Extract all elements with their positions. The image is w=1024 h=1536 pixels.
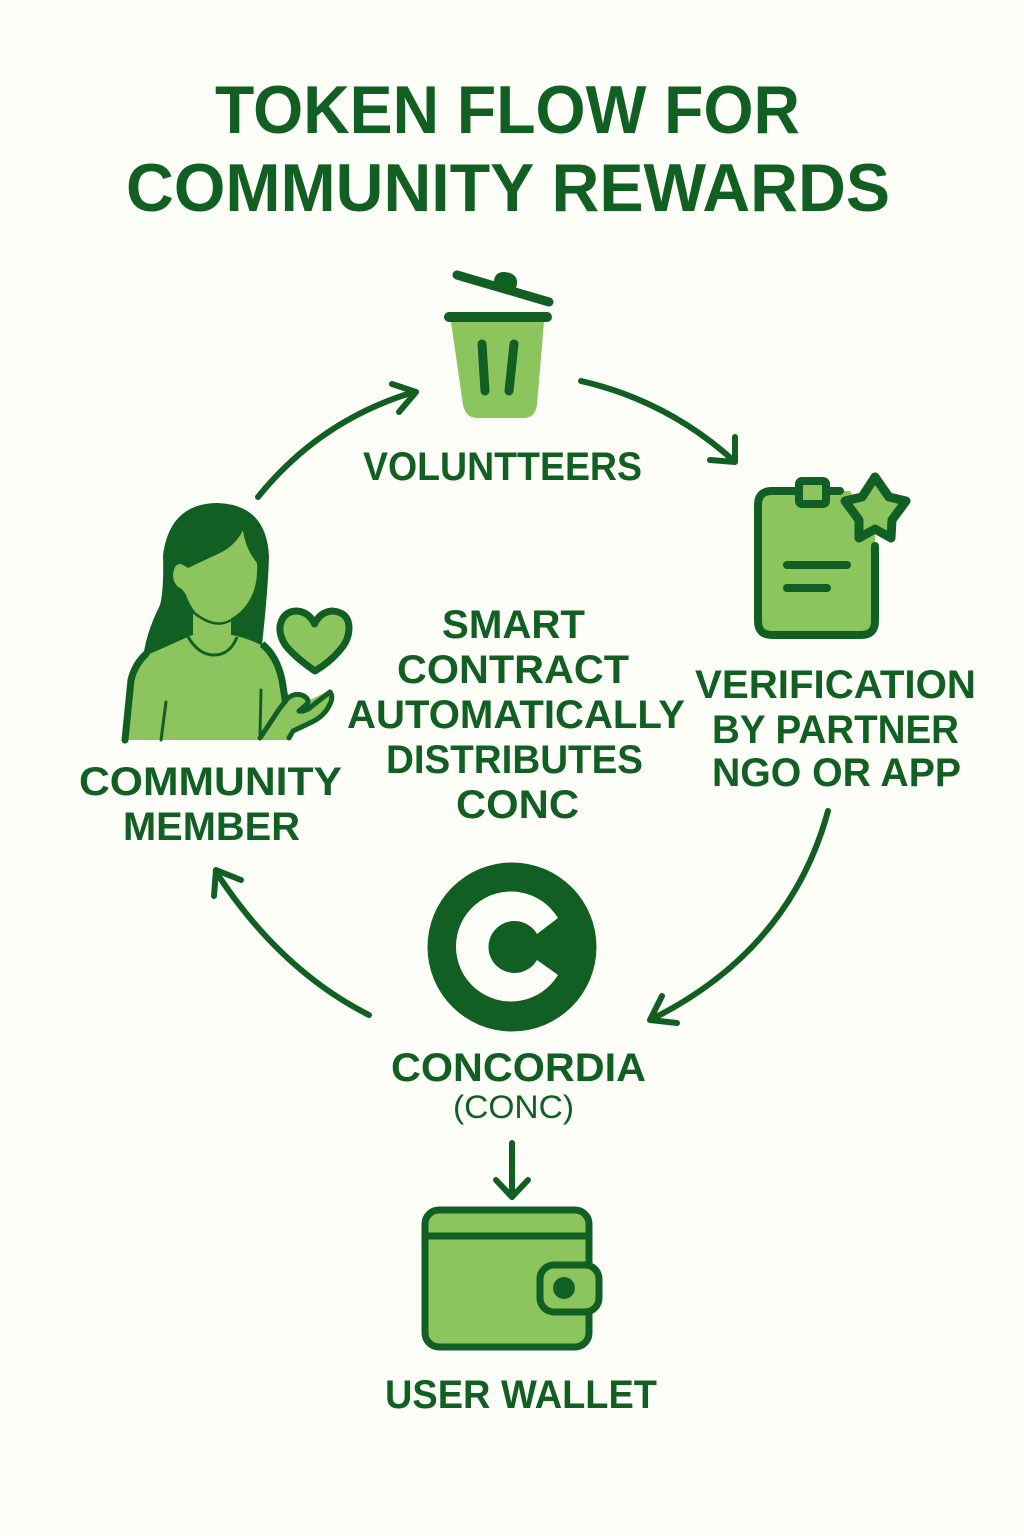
arrow: volunteers to verification [581,381,735,462]
label: concordia: CONCORDIA [391,1046,646,1090]
arrow: community member to volunteers [258,384,416,497]
title: TOKEN FLOW FOR [215,72,800,148]
label: verification [695,663,976,795]
arrow: concordia to wallet [496,1143,528,1197]
label: concordia: (CONC) [453,1089,574,1125]
label: community member [79,760,342,849]
center text: smart contract: CONTRACT [397,648,629,692]
icon: concordia coin [428,862,596,1032]
center text: smart contract: DISTRIBUTES [386,738,643,782]
icon: wallet [425,1210,599,1347]
title [126,72,890,226]
label: community member: MEMBER [123,805,300,849]
label: community member: COMMUNITY [79,760,342,804]
arrow: concordia to community member [214,870,369,1015]
icon: person with heart [125,503,349,740]
label: user wallet: USER WALLET [385,1373,657,1417]
label: verification: VERIFICATION [695,663,976,707]
icon: clipboard with star [758,477,906,635]
label: verification: BY PARTNER [712,708,959,752]
label: volunteers: VOLUNTTEERS [363,445,642,489]
title: COMMUNITY REWARDS [126,150,890,226]
arrow: verification to concordia [650,811,828,1023]
label: concordia [391,1046,646,1125]
icon: trash bin [449,272,549,418]
center text: smart contract [347,603,685,827]
label: verification: NGO OR APP [712,751,961,795]
center text: smart contract: AUTOMATICALLY [347,693,685,737]
center text: smart contract: CONC [456,783,579,827]
center text: smart contract: SMART [442,603,585,647]
